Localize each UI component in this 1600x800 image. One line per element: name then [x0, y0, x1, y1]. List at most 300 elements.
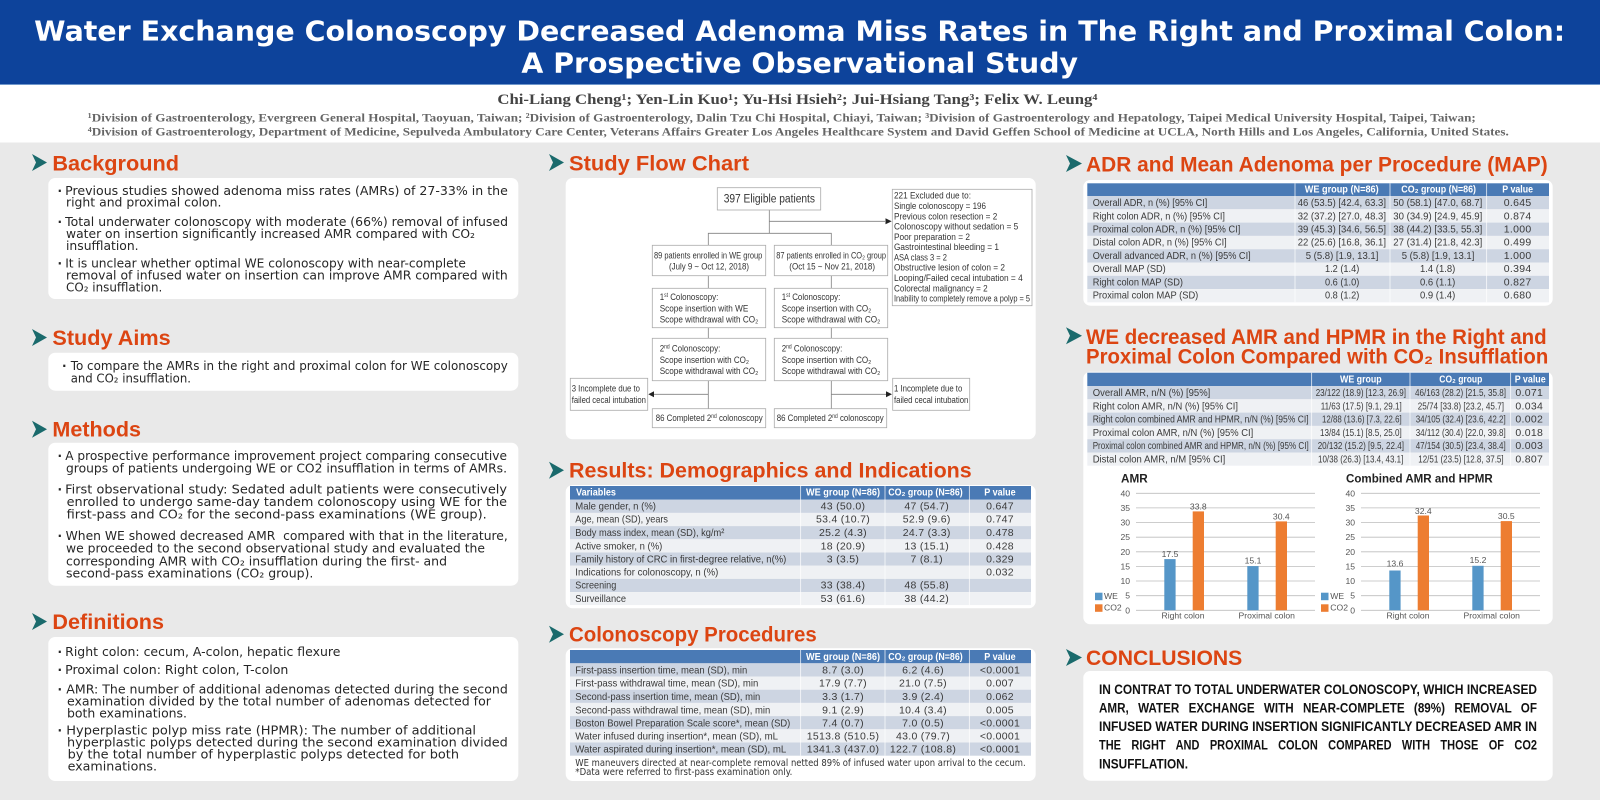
title banner: A Prospective Observational Study — [521, 47, 1078, 79]
box: excluded: Looping/Failed cecal intubation = 4 — [894, 273, 1023, 284]
panel: demographics table: 24.7 (3.3) — [903, 527, 951, 539]
box: CO2 incomplete — [893, 378, 970, 410]
panel: background: right and proximal colon. — [66, 195, 221, 210]
panel: demographics table — [566, 485, 1036, 608]
heading: WE decreased AMR and HPMR: Proximal Colon Compared with CO₂ Insufflation — [1086, 344, 1548, 368]
panel: study aims: To compare the AMRs in the right and proximal colon for WE colonoscopy — [70, 358, 508, 373]
panel: background: insufflation. — [66, 238, 139, 253]
panel: colonoscopy procedures table: Second-pass insertion time, mean (SD), min — [575, 691, 760, 703]
table: AMR and HPMR: 20/132 (15.2) [9.5, 22.4] — [1318, 440, 1404, 452]
heading: Study Flow Chart: Study Flow Chart — [569, 152, 749, 176]
panel: colonoscopy procedures table: CO₂ group (N=86) — [888, 651, 963, 663]
legend: AMR chart: CO2 — [1104, 602, 1122, 612]
panel: methods: A prospective performance improvement project comparing consecutive — [65, 448, 507, 463]
icon: arrow Methods — [32, 421, 47, 438]
box: WE enrolled — [652, 245, 766, 276]
affiliations: ⁴Division of Gastroenterology, Department of Medicine, Sepulveda Ambulatory Care Center, Veterans Affairs Greater Los Angeles Healthcare System and David Geffen School of Medicine at UCLA, North Hills and Los Angeles, California, United States. — [88, 124, 1509, 138]
panel: ADR table: 0.827 — [1504, 276, 1532, 288]
table: AMR and HPMR: Right colon combined AMR and HPMR, n/N (%) [95% CI] — [1093, 414, 1309, 426]
panel: ADR table: 27 (31.4) [21.8, 42.3] — [1393, 237, 1482, 249]
panel: ADR table: Proximal colon ADR, n (%) [95% CI] — [1093, 224, 1240, 236]
panel: ADR table: Overall advanced ADR, n (%) [95% CI] — [1093, 250, 1251, 262]
bar chart: AMR: 35 — [1120, 503, 1130, 513]
table: AMR and HPMR: 47/154 (30.5) [23.4, 38.4] — [1416, 440, 1506, 452]
panel: demographics table: 3 (3.5) — [827, 553, 859, 565]
box: CO2 completed: 86 Completed 2nd colonoscopy — [777, 413, 884, 424]
panel: background: · — [58, 184, 62, 198]
panel: background: removal of infused water on insertion can improve AMR compared with — [66, 267, 508, 282]
table: AMR and HPMR: 0.018 — [1515, 427, 1543, 439]
box: excluded: Inability to completely remove a polyp = 5 — [894, 293, 1030, 304]
panel: demographics table: Indications for colonoscopy, n (%) — [575, 567, 718, 579]
panel: background: water on insertion significantly increased AMR compared with CO₂ — [66, 226, 475, 241]
panel: demographics table: Family history of CRC in first-degree relative, n(%) — [575, 553, 786, 565]
icon: arrow Colonoscopy Procedures — [549, 626, 564, 643]
table: AMR and HPMR: 12/88 (13.6) [7.3, 22.6] — [1322, 414, 1402, 426]
panel: colonoscopy procedures table: 7.0 (0.5) — [902, 717, 944, 729]
box: excluded: Gastrointestinal bleeding = 1 — [894, 242, 999, 253]
panel: ADR table: 1.000 — [1504, 224, 1532, 236]
heading: ADR and MAP: ADR and Mean Adenoma per Procedure (MAP) — [1086, 153, 1548, 177]
table: AMR and HPMR: Distal colon AMR, n/M [95% CI] — [1093, 453, 1225, 465]
box: CO2 second colonoscopy — [774, 338, 888, 381]
panel: demographics table: 53 (61.6) — [821, 593, 865, 605]
table: AMR and HPMR: CO₂ group — [1439, 374, 1482, 386]
panel: conclusions: AMR, WATER EXCHANGE WITH NEAR-COMPLETE (89%) REMOVAL OF — [1099, 701, 1537, 716]
panel: colonoscopy procedures table: WE group (N=86) — [806, 651, 880, 663]
bar chart: combined AMR and HPMR: 15.2 — [1470, 555, 1487, 565]
title banner — [0, 0, 1600, 85]
panel: demographics table: 0.329 — [986, 553, 1014, 565]
panel: conclusions: INFUSED WATER DURING INSERTION SIGNIFICANTLY DECREASED AMR IN — [1099, 719, 1537, 734]
panel: ADR table: 0.9 (1.4) — [1420, 290, 1455, 302]
affiliations — [88, 111, 1509, 138]
box: CO2 second colonoscopy: 2nd Colonoscopy: — [782, 344, 842, 355]
panel: colonoscopy procedures table: 0.062 — [986, 691, 1014, 703]
panel: demographics table: Body mass index, mean (SD), kg/m² — [575, 527, 725, 539]
panel: definitions: examinations. — [68, 759, 157, 774]
box: WE first colonoscopy: 1st Colonoscopy: — [660, 292, 718, 303]
panel: demographics table: 53.4 (10.7) — [816, 514, 870, 526]
bar chart: combined AMR and HPMR: 20 — [1345, 547, 1355, 557]
panel: colonoscopy procedures table: 3.3 (1.7) — [822, 691, 864, 703]
box: CO2 first colonoscopy: Scope insertion with CO₂ — [782, 303, 872, 314]
panel: ADR table: 38 (44.2) [33.5, 55.3] — [1393, 224, 1482, 236]
panel: demographics table: 0.478 — [986, 527, 1014, 539]
panel: ADR table: 5 (5.8) [1.9, 13.1] — [1402, 250, 1474, 262]
panel: methods: we proceeded to the second observational study and evaluated the — [66, 541, 485, 556]
panel: study aims: and CO₂ insufflation. — [71, 371, 191, 386]
panel: demographics table: 7 (8.1) — [910, 553, 943, 565]
panel: definitions: Right colon: cecum, A-colon, hepatic flexure — [65, 644, 340, 659]
panel: colonoscopy procedures table: <0.0001 — [980, 717, 1020, 729]
panel: colonoscopy procedures table: 9.1 (2.9) — [822, 704, 864, 716]
box: WE incomplete: failed cecal intubation — [572, 395, 646, 406]
bar chart: AMR: 15 — [1120, 561, 1130, 571]
box: WE incomplete: 3 Incomplete due to — [572, 384, 640, 395]
bar chart: AMR: 40 — [1120, 488, 1130, 498]
icon: arrow WE decreased — [1066, 327, 1082, 344]
panel: definitions: Hyperplastic polyp miss rate (HPMR): The number of additional — [66, 723, 476, 738]
panel: ADR table: 22 (25.6) [16.8, 36.1] — [1298, 237, 1386, 249]
panel: ADR table: 1.2 (1.4) — [1325, 263, 1359, 275]
panel: ADR table: Right colon ADR, n (%) [95% CI] — [1093, 210, 1225, 222]
panel: background — [48, 178, 518, 299]
legend: AMR chart: WE — [1104, 591, 1118, 601]
bar chart: AMR — [1095, 472, 1315, 620]
table: AMR and HPMR: 23/122 (18.9) [12.3, 26.9] — [1316, 387, 1406, 399]
panel: demographics table: Variables — [576, 487, 616, 499]
bar chart: AMR: Right colon — [1162, 610, 1205, 620]
panel: AMR table and charts — [1083, 372, 1553, 624]
table: AMR and HPMR: 0.071 — [1515, 387, 1543, 399]
panel: colonoscopy procedures table: 122.7 (108.8) — [890, 744, 956, 756]
panel: colonoscopy procedures table: Second-pass withdrawal time, mean (SD), min — [575, 704, 770, 716]
panel: methods: corresponding AMR with CO₂ insufflation during the first- and — [66, 553, 447, 568]
arrow: to excluded — [886, 218, 892, 224]
panel: ADR table: 0.394 — [1504, 263, 1532, 275]
icon: arrow Study Aims — [32, 329, 47, 346]
bar chart: AMR: 33.8 — [1190, 501, 1207, 511]
panel: colonoscopy procedures table: 7.4 (0.7) — [822, 717, 864, 729]
panel: demographics table: 0.428 — [986, 540, 1014, 552]
box: CO2 second colonoscopy: Scope insertion with CO₂ — [782, 355, 872, 366]
box: WE completed: 86 Completed 2nd colonoscopy — [656, 413, 763, 424]
box: CO2 incomplete: failed cecal intubation — [894, 395, 968, 406]
panel: demographics table: WE group (N=86) — [806, 487, 880, 499]
box: excluded: ASA class 3 = 2 — [894, 252, 947, 263]
panel: ADR table: 0.874 — [1504, 210, 1532, 222]
table: AMR and HPMR: 0.807 — [1515, 453, 1543, 465]
bar chart: AMR: 10 — [1120, 576, 1130, 586]
arrow: to CO2 incomplete — [886, 391, 892, 397]
box: CO2 enrolled — [774, 245, 888, 276]
box: WE enrolled: 89 patients enrolled in WE group — [654, 250, 762, 261]
panel: definitions: · — [58, 682, 62, 696]
affiliations: ¹Division of Gastroenterology, Evergreen General Hospital, Taoyuan, Taiwan; ²Division of Gastroenterology, Dalin Tzu Chi Hospital, Chiayi, Taiwan; ³Division of Gastroenterology and Hepatology, Taipei Medical University Hospital, Taipei, Taiwan; — [88, 111, 1476, 125]
table: AMR and HPMR: Proximal colon AMR, n/N (%) [95% CI] — [1093, 427, 1253, 439]
table: AMR and HPMR: 0.034 — [1515, 400, 1543, 412]
panel: demographics table: Surveillance — [575, 593, 626, 605]
table: AMR and HPMR: 0.002 — [1515, 414, 1543, 426]
panel: ADR table: Right colon MAP (SD) — [1093, 276, 1183, 288]
panel: methods — [48, 443, 518, 586]
bar chart: combined AMR and HPMR: 0 — [1350, 605, 1355, 615]
panel: definitions: AMR: The number of additional adenomas detected during the second — [66, 681, 508, 696]
bar chart: combined AMR and HPMR: Right colon — [1386, 610, 1430, 620]
panel: ADR table: 39 (45.3) [34.6, 56.5] — [1298, 224, 1386, 236]
panel: definitions: by the total number of hyperplastic polyps detected for both — [68, 747, 459, 762]
bar chart: combined AMR and HPMR: Proximal colon — [1464, 610, 1520, 620]
panel: demographics table: 38 (44.2) — [904, 593, 949, 605]
heading: WE decreased AMR and HPMR — [1086, 325, 1548, 368]
table: AMR and HPMR: Right colon AMR, n/N (%) [95% CI] — [1093, 400, 1238, 412]
table: AMR and HPMR: 12/51 (23.5) [12.8, 37.5] — [1418, 453, 1504, 465]
heading: Results: Results: Demographics and Indications — [569, 459, 972, 483]
panel: ADR table: 1.4 (1.8) — [1420, 263, 1455, 275]
box: CO2 enrolled: 87 patients enrolled in CO₂ group — [776, 250, 886, 261]
box: excluded: Poor preparation = 2 — [894, 232, 970, 243]
box: excluded: Colonoscopy without sedation = 5 — [894, 222, 1018, 233]
table: AMR and HPMR: Proximal colon combined AMR and HPMR, n/N (%) [95% CI] — [1093, 440, 1309, 452]
panel: methods: When WE showed decreased AMR compared with that in the literature, — [66, 528, 508, 543]
panel: definitions: hyperplastic polyps detected during the second examination divided — [67, 735, 508, 750]
panel: demographics table: 33 (38.4) — [821, 580, 865, 592]
bar chart: AMR: 15.1 — [1245, 556, 1262, 566]
title banner: Water Exchange Colonoscopy Decreased Adenoma Miss Rates in The Right and Proximal Colon: — [34, 16, 1565, 48]
panel: demographics table: Screening — [575, 580, 616, 592]
box: WE first colonoscopy: Scope withdrawal with CO₂ — [660, 314, 759, 325]
panel: colonoscopy procedures table: 1513.8 (510.5) — [807, 730, 879, 742]
heading: Colonoscopy Procedures: Colonoscopy Procedures — [569, 623, 817, 647]
panel: methods: · — [58, 449, 62, 463]
legend: combined chart: CO2 — [1330, 602, 1348, 612]
table footnote: WE maneuvers directed at near-complete removal netted 89% of infused water upon arrival to the cecum. — [575, 758, 1026, 769]
box: CO2 first colonoscopy: Scope withdrawal with CO₂ — [782, 314, 881, 325]
bar chart: combined AMR and HPMR — [1321, 472, 1540, 620]
panel: colonoscopy procedures table: 21.0 (7.5) — [899, 678, 947, 690]
table footnote: *Data were referred to first-pass examination only. — [575, 767, 792, 778]
bar chart: combined AMR and HPMR: 13.6 — [1387, 558, 1404, 568]
heading: Methods: Methods — [52, 418, 141, 442]
table: AMR and HPMR: 34/105 (32.4) [23.6, 42.2] — [1416, 414, 1506, 426]
panel: demographics table: 13 (15.1) — [904, 540, 949, 552]
box: WE enrolled: (July 9 ~ Oct 12, 2018) — [669, 261, 749, 272]
heading: Study Aims: Study Aims — [52, 326, 171, 350]
bar chart: AMR: 20 — [1120, 547, 1130, 557]
panel: demographics table: Active smoker, n (%) — [575, 540, 662, 552]
bar chart: combined AMR and HPMR: 32.4 — [1415, 506, 1432, 516]
panel: methods: First observational study: Sedated adult patients were consecutively — [65, 481, 507, 496]
table: AMR and HPMR — [1087, 373, 1549, 466]
panel: colonoscopy procedures table: 8.7 (3.0) — [822, 664, 864, 676]
panel: colonoscopy procedures table: P value — [984, 651, 1016, 663]
table: AMR and HPMR: 11/63 (17.5) [9.1, 29.1] — [1321, 400, 1402, 412]
box: WE second colonoscopy: 2nd Colonoscopy: — [660, 344, 720, 355]
panel: study flow chart — [566, 178, 1036, 439]
bar chart: combined AMR and HPMR: 40 — [1345, 488, 1355, 498]
table: AMR and HPMR: 25/74 [33.8) [23.2, 45.7] — [1418, 400, 1504, 412]
table: AMR and HPMR: 46/163 (28.2) [21.5, 35.8] — [1415, 387, 1506, 399]
panel: ADR table: 0.499 — [1504, 237, 1532, 249]
panel: ADR table — [1083, 180, 1553, 306]
panel: ADR table: Overall ADR, n (%) [95% CI] — [1093, 197, 1207, 209]
box: WE first colonoscopy — [652, 288, 766, 328]
panel: ADR table: WE group (N=86) — [1305, 184, 1379, 196]
panel: background: CO₂ insufflation. — [66, 280, 162, 295]
box: CO2 first colonoscopy: 1st Colonoscopy: — [782, 292, 840, 303]
panel: ADR table: 32 (37.2) [27.0, 48.3] — [1298, 210, 1386, 222]
bar chart: AMR: 30.4 — [1273, 511, 1290, 521]
panel: colonoscopy procedures table: 6.2 (4.6) — [902, 664, 944, 676]
panel: demographics table: 52.9 (9.6) — [903, 514, 951, 526]
panel: background: It is unclear whether optimal WE colonoscopy with near-complete — [65, 256, 466, 271]
bar chart: combined AMR and HPMR: 30.5 — [1498, 511, 1515, 521]
heading: Background: Background — [52, 152, 179, 176]
panel: colonoscopy procedures table: 0.007 — [986, 678, 1014, 690]
panel: demographics table: 48 (55.8) — [904, 580, 949, 592]
panel: demographics table: 0.647 — [986, 501, 1014, 513]
panel: methods: first-pass and CO₂ for the second-pass examinations (WE group). — [67, 507, 487, 522]
table: AMR and HPMR: Overall AMR, n/N (%) [95%] — [1093, 387, 1210, 399]
legend: combined chart — [1321, 591, 1348, 612]
panel: background: Total underwater colonoscopy with moderate (66%) removal of infused — [64, 214, 508, 229]
box: WE completed — [652, 409, 766, 428]
icon: arrow Results — [549, 462, 564, 479]
panel: definitions: · — [58, 724, 62, 738]
legend: AMR chart — [1095, 591, 1122, 612]
panel: definitions: Proximal colon: Right colon, T-colon — [65, 662, 288, 677]
panel: ADR table: 5 (5.8) [1.9, 13.1] — [1306, 250, 1378, 262]
box: eligible patients: 397 Eligible patients — [724, 193, 815, 205]
panel: ADR table: 1.000 — [1504, 250, 1532, 262]
icon: arrow ADR — [1066, 155, 1082, 172]
bar chart: AMR: 25 — [1120, 532, 1130, 542]
table footnote — [575, 758, 1026, 778]
arrow: to WE incomplete — [648, 391, 654, 397]
panel: definitions: · — [58, 645, 62, 659]
panel: demographics table: P value — [984, 487, 1016, 499]
icon: arrow Definitions — [32, 613, 47, 630]
box: WE second colonoscopy: Scope withdrawal with CO₂ — [660, 366, 759, 377]
bar chart: AMR: Proximal colon — [1239, 610, 1295, 620]
panel: ADR table: Overall MAP (SD) — [1093, 263, 1166, 275]
panel: demographics table: 0.747 — [986, 514, 1014, 526]
table: AMR and HPMR: 10/38 (26.3) [13.4, 43.1] — [1318, 453, 1403, 465]
panel: colonoscopy procedures table: Water aspirated during insertion*, mean (SD), mL — [575, 744, 786, 756]
panel: ADR table: 50 (58.1) [47.0, 68.7] — [1393, 197, 1482, 209]
bar chart: AMR: 17.5 — [1162, 549, 1179, 559]
panel: demographics table: 18 (20.9) — [821, 540, 865, 552]
bar chart: combined AMR and HPMR: 5 — [1350, 591, 1355, 601]
box: CO2 completed — [774, 409, 887, 428]
bar chart: combined AMR and HPMR: 30 — [1345, 518, 1355, 528]
panel: colonoscopy procedures table: <0.0001 — [980, 664, 1020, 676]
box: WE second colonoscopy: Scope insertion with CO₂ — [660, 355, 749, 366]
panel: colonoscopy procedures table: 1341.3 (437.0) — [807, 744, 879, 756]
panel: methods: groups of patients undergoing WE or CO2 insufflation in terms of AMRs. — [66, 460, 507, 475]
panel: demographics table: Age, mean (SD), years — [575, 514, 668, 526]
panel: ADR table: P value — [1502, 184, 1533, 196]
panel: conclusions — [1083, 671, 1553, 781]
heading: WE decreased AMR and HPMR: WE decreased AMR and HPMR in the Right and — [1086, 325, 1547, 349]
panel: ADR table: 30 (34.9) [24.9, 45.9] — [1393, 210, 1482, 222]
box: CO2 enrolled: (Oct 15 ~ Nov 21, 2018) — [789, 261, 875, 272]
panel: colonoscopy procedures table: First-pass insertion time, mean (SD), min — [575, 664, 747, 676]
table: AMR and HPMR: 34/112 (30.4) [22.0, 39.8] — [1416, 427, 1506, 439]
panel: demographics table: 47 (54.7) — [904, 501, 949, 513]
panel: ADR table: 0.6 (1.1) — [1420, 276, 1455, 288]
panel: demographics table: 43 (50.0) — [821, 501, 865, 513]
icon: arrow Study Flow Chart — [549, 154, 564, 171]
box: CO2 second colonoscopy: Scope withdrawal with CO₂ — [782, 366, 881, 377]
box: excluded: Colorectal malignancy = 2 — [894, 283, 988, 294]
box: CO2 first colonoscopy — [774, 288, 888, 328]
panel: ADR table: Distal colon ADR, n (%) [95% CI] — [1093, 237, 1227, 249]
panel: methods: enrolled to undergo same-day tandem colonoscopy using WE for the — [67, 494, 507, 509]
panel: background: Previous studies showed adenoma miss rates (AMRs) of 27-33% in the — [65, 183, 508, 198]
box: WE incomplete — [570, 378, 648, 410]
panel: ADR table: CO₂ group (N=86) — [1401, 184, 1476, 196]
panel: demographics table: Male gender, n (%) — [575, 501, 656, 513]
table: AMR and HPMR: P value — [1515, 374, 1546, 386]
panel: demographics table: 25.2 (4.3) — [819, 527, 867, 539]
panel: colonoscopy procedures table: Boston Bowel Preparation Scale score*, mean (SD) — [575, 717, 790, 729]
panel: colonoscopy procedures table: 10.4 (3.4) — [899, 704, 947, 716]
panel: methods: · — [58, 482, 62, 496]
legend: combined chart: WE — [1330, 591, 1344, 601]
bar chart: combined AMR and HPMR: 10 — [1345, 576, 1355, 586]
panel: conclusions: INSUFFLATION. — [1099, 756, 1188, 771]
icon: arrow Conclusions — [1066, 649, 1082, 666]
panel: colonoscopy procedures table: 3.9 (2.4) — [902, 691, 944, 703]
box: WE first colonoscopy: Scope insertion with WE — [660, 303, 748, 314]
box: eligible patients — [717, 188, 821, 210]
bar chart: AMR: 5 — [1125, 591, 1130, 601]
panel: demographics table: CO₂ group (N=86) — [888, 487, 963, 499]
box: excluded: Obstructive lesion of colon = 2 — [894, 263, 1005, 274]
authors: Chi-Liang Cheng¹; Yen-Lin Kuo¹; Yu-Hsi Hsieh²; Jui-Hsiang Tang³; Felix W. Leung⁴ — [497, 92, 1098, 108]
panel: colonoscopy procedures table: <0.0001 — [980, 730, 1020, 742]
box: excluded: Previous colon resection = 2 — [894, 211, 997, 222]
panel: ADR table: Proximal colon MAP (SD) — [1093, 290, 1198, 302]
box: excluded: 221 Excluded due to: — [894, 190, 971, 201]
box: excluded: Single colonoscopy = 196 — [894, 201, 986, 212]
table: AMR and HPMR: 13/84 (15.1) [8.5, 25.0] — [1320, 427, 1402, 439]
panel: colonoscopy procedures table: 17.9 (7.7) — [819, 678, 867, 690]
panel: background: · — [58, 257, 62, 271]
box: excluded — [892, 189, 1032, 306]
panel: ADR table: 0.680 — [1504, 290, 1532, 302]
panel: definitions — [48, 637, 518, 781]
bar chart: AMR: 0 — [1125, 605, 1130, 615]
panel: ADR table: 0.8 (1.2) — [1325, 290, 1359, 302]
panel: study aims: · — [62, 359, 67, 373]
panel: colonoscopy procedures table — [566, 648, 1036, 781]
panel: ADR table: 46 (53.5) [42.4, 63.3] — [1298, 197, 1386, 209]
panel: ADR table: 0.6 (1.0) — [1325, 276, 1359, 288]
icon: arrow Background — [32, 154, 47, 171]
panel: conclusions: IN CONTRAT TO TOTAL UNDERWATER COLONOSCOPY, WHICH INCREASED — [1099, 682, 1537, 697]
box: CO2 incomplete: 1 Incomplete due to — [894, 384, 962, 395]
panel: colonoscopy procedures table: 0.005 — [986, 704, 1014, 716]
panel: definitions: both examinations. — [67, 705, 187, 720]
bar chart: combined AMR and HPMR: 15 — [1345, 561, 1355, 571]
panel: colonoscopy procedures table: First-pass withdrawal time, mean (SD), min — [575, 678, 758, 690]
bar chart: AMR: AMR — [1121, 472, 1148, 486]
panel: background: · — [58, 215, 62, 229]
bar chart: combined AMR and HPMR: 35 — [1345, 503, 1355, 513]
box: WE second colonoscopy — [652, 338, 766, 381]
heading: Definitions: Definitions — [52, 610, 164, 634]
panel: definitions: · — [58, 663, 62, 677]
panel: colonoscopy procedures table: Water infused during insertion*, mean (SD), mL — [575, 730, 778, 742]
bar chart: combined AMR and HPMR: Combined AMR and HPMR — [1346, 472, 1493, 486]
panel: demographics table: 0.032 — [986, 567, 1014, 579]
panel: definitions: examination divided by the total number of adenomas detected for — [67, 693, 492, 708]
bar chart: combined AMR and HPMR: 25 — [1345, 532, 1355, 542]
panel: ADR table: 0.645 — [1504, 197, 1532, 209]
panel: methods: · — [58, 529, 62, 543]
panel: colonoscopy procedures table: <0.0001 — [980, 744, 1020, 756]
table: AMR and HPMR: WE group — [1340, 374, 1382, 386]
panel: methods: second-pass examinations (CO₂ group). — [66, 566, 313, 581]
table: AMR and HPMR: 0.003 — [1515, 440, 1543, 452]
heading: Conclusions: CONCLUSIONS — [1086, 646, 1242, 670]
panel: colonoscopy procedures table: 43.0 (79.7) — [896, 730, 950, 742]
bar chart: AMR: 30 — [1120, 518, 1130, 528]
panel: study aims — [48, 353, 518, 391]
